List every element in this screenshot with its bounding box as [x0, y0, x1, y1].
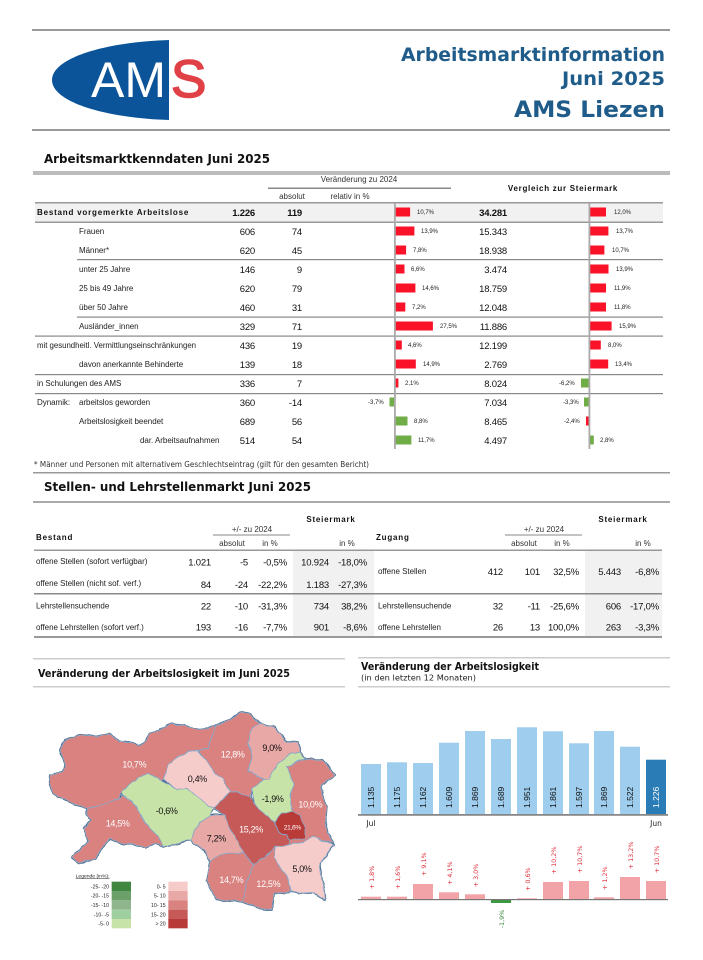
row: offene Stellen nicht sofort verfügbar: 84 [201, 580, 211, 591]
bar chart: Veränderung zum Vorjahr in Prozent: + 4,1% [446, 861, 454, 885]
row: davon anerkannte Behinderte [79, 360, 633, 371]
bar chart: Veränderung zum Vorjahr in Prozent: + 9,1% [420, 852, 428, 876]
row: über 50 Jahre: 12.048 [479, 303, 507, 314]
row: Frauen [79, 226, 634, 238]
row: offene Lehrstellen sofort verfügbar: offene Lehrstellen (sofort verf.) [36, 623, 144, 632]
row: Ausländer_innen [79, 322, 637, 333]
row: Ausländer_innen: 71 [292, 322, 302, 333]
row: Zugang offene Stellen: 32,5% [553, 567, 580, 578]
row: in Schulungen des AMS: in Schulungen des AMS [37, 379, 121, 388]
row: Arbeitslosigkeit beendet: Arbeitslosigkeit beendet [79, 417, 164, 426]
row: 25 bis 49 Jahre [79, 284, 631, 295]
heading: Stellen- und Lehrstellenmarkt: Stellen- und Lehrstellenmarkt Juni 2025 [44, 479, 311, 494]
row: offene Stellen sofort verfügbar [36, 557, 368, 568]
row: Dynamik arbeitslos geworden: 360 [240, 398, 255, 409]
table head: Zugang: in % [554, 539, 570, 548]
row: Bestand vorgemerkte Arbeitslose [37, 208, 632, 219]
row: Arbeitslosigkeit beendet: 56 [292, 417, 302, 428]
row: Zugang offene Stellen [378, 567, 660, 578]
row: in Schulungen des AMS: 336 [240, 379, 255, 390]
row: Bestand vorgemerkte Arbeitslose: 119 [287, 208, 302, 219]
row: Ausländer_innen: 11.886 [480, 322, 507, 333]
bar chart: Veränderung zum Vorjahr in Prozent: + 13,2% [627, 842, 635, 869]
row: mit gesundheitl. Vermittlungseinschränkungen: 4,6% [408, 343, 422, 349]
row: offene Stellen sofort verfügbar: offene Stellen (sofort verfügbar) [36, 557, 148, 566]
row: offene Stellen nicht sofort verfügbar: 1.183 [306, 580, 329, 591]
row: offene Stellen sofort verfügbar: 1.021 [188, 558, 211, 568]
row: unter 25 Jahre [79, 264, 634, 276]
row: Dynamik arbeitslos geworden: 7.034 [484, 398, 507, 409]
bar chart: Veränderung zum Vorjahr in Prozent: -1,9% [498, 910, 506, 928]
row: unter 25 Jahre: 146 [240, 265, 255, 276]
map legend [76, 873, 188, 928]
bar chart: Arbeitslose letzte 12 Monate: 1.869 [470, 786, 480, 808]
bar chart: Arbeitslose letzte 12 Monate: 1.522 [625, 786, 635, 808]
row: offene Lehrstellen sofort verfügbar: -7,7% [263, 622, 288, 634]
row: Arbeitslosigkeit beendet [79, 416, 589, 428]
bar chart: Arbeitslose letzte 12 Monate: Jun [649, 819, 662, 828]
row: über 50 Jahre: über 50 Jahre [79, 303, 129, 312]
row: Frauen: 13,9% [421, 229, 439, 235]
table head: Bestand: in % [262, 539, 278, 548]
bar chart: Arbeitslose letzte 12 Monate: 1.689 [496, 786, 506, 808]
row: Männer: 45 [292, 246, 302, 257]
row: Zugang Lehrstellensuchende: Lehrstellensuchende [378, 602, 452, 610]
table head: Bestand: in % [339, 539, 355, 548]
bar chart: Arbeitslose letzte 12 Monate: 1.135 [366, 786, 376, 808]
row: mit gesundheitl. Vermittlungseinschränkungen: 436 [240, 341, 255, 352]
row: über 50 Jahre: 460 [240, 303, 255, 314]
row: mit gesundheitl. Vermittlungseinschränkungen: 19 [292, 341, 302, 352]
map legend: Legende (in%): [76, 873, 109, 879]
row: Dynamik arbeitslos geworden: arbeitslos geworden [79, 398, 150, 407]
map labels: 9,0% [262, 743, 282, 753]
table head: absolut [279, 192, 306, 201]
bar chart: Veränderung zum Vorjahr in Prozent [358, 842, 668, 928]
bar chart: Veränderung zum Vorjahr in Prozent: + 10,2% [550, 847, 558, 874]
row: unter 25 Jahre: 3.474 [484, 265, 507, 276]
row: offene Lehrstellen sofort verfügbar: 901 [314, 622, 329, 634]
table head: Bestand [36, 515, 356, 548]
bar chart: Arbeitslose letzte 12 Monate: 1.951 [522, 786, 532, 808]
row: offene Stellen sofort verfügbar: -5 [240, 558, 248, 568]
bar chart: Arbeitslose letzte 12 Monate [358, 727, 668, 828]
row: Ausländer_innen: 15,9% [619, 324, 637, 330]
row: Bestand vorgemerkte Arbeitslose: 1.226 [232, 208, 255, 219]
map legend: 0- 5 [157, 884, 166, 890]
row: Arbeitslosigkeit beendet: 8.465 [484, 417, 507, 428]
panel heading: Veränderung der Arbeitslosigkeit 12 Monate: Veränderung der Arbeitslosigkeit [361, 661, 539, 673]
map legend: 5- 10 [154, 894, 166, 900]
map legend: -5- 0 [98, 922, 109, 928]
bar chart: Veränderung zum Vorjahr in Prozent: + 3,0% [472, 864, 480, 887]
bar chart: Arbeitslose letzte 12 Monate: 1.162 [418, 786, 428, 808]
row: davon anerkannte Behinderte: 18 [292, 360, 302, 371]
row: 25 bis 49 Jahre: 18.759 [479, 284, 507, 295]
row: Lehrstellensuchende [36, 602, 368, 612]
row: mit gesundheitl. Vermittlungseinschränkungen [37, 340, 622, 352]
row: davon anerkannte Behinderte: 2.769 [484, 360, 507, 371]
row: dar. Arbeitsaufnahmen: dar. Arbeitsaufnahmen [140, 436, 219, 445]
row: Ausländer_innen: Ausländer_innen [79, 322, 139, 331]
row: unter 25 Jahre: 6,6% [411, 267, 425, 273]
logo: AMS: S [171, 50, 206, 109]
row: Dynamik arbeitslos geworden: -3,7% [368, 400, 384, 406]
row: Zugang Lehrstellensuchende: 606 [606, 602, 621, 612]
row: 25 bis 49 Jahre: 11,9% [614, 286, 631, 292]
row: Lehrstellensuchende: 22 [201, 602, 211, 612]
row: Männer: 620 [240, 246, 255, 257]
row: in Schulungen des AMS: 7 [297, 379, 302, 390]
row: Bestand vorgemerkte Arbeitslose: Bestand vorgemerkte Arbeitslose [37, 208, 189, 217]
table head: Zugang: in % [635, 539, 651, 548]
row: Männer [79, 246, 630, 257]
row: in Schulungen des AMS: 2,1% [405, 381, 419, 387]
row: Männer: 10,7% [612, 248, 630, 254]
bar chart: Arbeitslose letzte 12 Monate: 1.861 [548, 786, 558, 808]
row: davon anerkannte Behinderte: 139 [240, 360, 255, 371]
panel heading: Veränderung der Arbeitslosigkeit 12 Monate [358, 657, 670, 688]
row: Zugang offene Stellen: -6,8% [635, 567, 660, 578]
table head [279, 175, 618, 201]
map labels: -0,6% [156, 806, 178, 816]
panel heading: Veränderung der Arbeitslosigkeit im Juni 2025: Veränderung der Arbeitslosigkeit im Juni 2025 [38, 668, 290, 680]
row: Dynamik arbeitslos geworden: -14 [289, 398, 302, 409]
row: 25 bis 49 Jahre: 25 bis 49 Jahre [79, 284, 134, 293]
bar chart: Veränderung zum Vorjahr in Prozent: + 1,8% [368, 866, 376, 889]
title: Juni 2025 [560, 68, 665, 90]
logo: AMS: AM [91, 52, 166, 108]
row: Zugang Lehrstellensuchende [378, 602, 660, 612]
table head: Veränderung zu 2024 [321, 175, 398, 184]
map legend: -10- -5 [94, 912, 109, 918]
row: Zugang Lehrstellensuchende: -11 [528, 602, 540, 612]
map labels: 12,8% [221, 749, 245, 759]
bar chart: Arbeitslose letzte 12 Monate: Jul [365, 819, 376, 828]
row: Männer: 7,8% [413, 248, 427, 254]
bar chart: Veränderung zum Vorjahr in Prozent: + 0,6% [524, 867, 532, 891]
footnote: * Männer und Personen mit alternativem Geschlechtseintrag (gilt für den gesamten Bericht) [34, 460, 369, 469]
row: Zugang offene Lehrstellen: 100,0% [548, 622, 580, 634]
map labels: -1,9% [262, 794, 284, 804]
map: Steiermark [49, 712, 335, 928]
row: dar. Arbeitsaufnahmen: 4.497 [484, 436, 507, 447]
heading: Arbeitsmarktkenndaten: Arbeitsmarktkenndaten Juni 2025 [44, 151, 270, 166]
title: AMS Liezen [514, 97, 665, 123]
table head: relativ in % [330, 192, 370, 201]
map legend: 15- 20 [151, 912, 166, 918]
row: offene Lehrstellen sofort verfügbar [36, 622, 368, 634]
row: offene Stellen nicht sofort verfügbar [36, 579, 368, 591]
table head: Bestand: Steiermark [306, 515, 356, 524]
map legend: -20- -15 [91, 894, 109, 900]
row: Zugang offene Lehrstellen: -3,3% [635, 622, 660, 634]
row: in Schulungen des AMS [37, 378, 589, 390]
row: unter 25 Jahre: 9 [297, 265, 302, 276]
row: offene Stellen sofort verfügbar: -18,0% [338, 558, 368, 568]
row: über 50 Jahre: 11,8% [614, 305, 631, 311]
row: 25 bis 49 Jahre: 79 [292, 284, 302, 295]
bar chart: Veränderung zum Vorjahr in Prozent: + 1,2% [601, 866, 609, 890]
row: Zugang offene Lehrstellen: offene Lehrstellen [378, 623, 441, 632]
logo: AMS [52, 40, 206, 120]
map labels: 14,5% [106, 819, 130, 829]
row: offene Lehrstellen sofort verfügbar: -16 [235, 622, 248, 634]
row: Zugang Lehrstellensuchende: 32 [493, 602, 503, 612]
row: Dynamik arbeitslos geworden: Dynamik: [37, 398, 70, 407]
table: Arbeitsmarktkenndaten [33, 172, 670, 449]
row: Zugang offene Stellen: 5.443 [598, 567, 621, 578]
bar chart: Arbeitslose letzte 12 Monate: 1.609 [444, 786, 454, 808]
row: Dynamik arbeitslos geworden [37, 398, 589, 409]
map legend: -25- -20 [91, 884, 109, 890]
table head: Vergleich zur Steiermark [508, 184, 618, 193]
row: unter 25 Jahre: unter 25 Jahre [79, 265, 131, 274]
row: mit gesundheitl. Vermittlungseinschränkungen: mit gesundheitl. Vermittlungseinschränkungen [37, 341, 196, 350]
row: Ausländer_innen: 329 [240, 322, 255, 333]
row: in Schulungen des AMS: 8.024 [484, 379, 507, 390]
map legend: 10- 15 [151, 903, 166, 909]
row: dar. Arbeitsaufnahmen [140, 436, 614, 447]
table head: Bestand: +/- zu 2024 [232, 525, 273, 534]
title [401, 44, 665, 123]
row: über 50 Jahre: 31 [292, 303, 302, 314]
table head: Zugang [376, 515, 651, 548]
row: Frauen: 606 [240, 227, 255, 238]
map labels: 14,7% [219, 875, 244, 885]
bar chart: Arbeitslose letzte 12 Monate: 1.175 [392, 786, 402, 808]
row: offene Stellen nicht sofort verfügbar: -24 [235, 580, 248, 591]
row: Frauen: Frauen [79, 227, 104, 236]
header [32, 29, 670, 131]
row: Männer: Männer* [79, 246, 109, 255]
bar chart: Arbeitslose letzte 12 Monate: 1.869 [599, 786, 609, 808]
row: unter 25 Jahre: 13,9% [616, 267, 634, 273]
map labels: 10,7% [122, 759, 147, 769]
row: Zugang offene Stellen: offene Stellen [378, 567, 426, 576]
row: Arbeitslosigkeit beendet: 689 [240, 417, 255, 428]
row: Zugang Lehrstellensuchende: -25,6% [550, 602, 580, 612]
row: Zugang offene Lehrstellen [378, 622, 660, 634]
row: offene Lehrstellen sofort verfügbar: 193 [196, 622, 211, 634]
row: Bestand vorgemerkte Arbeitslose: 10,7% [417, 210, 435, 216]
row: Zugang offene Stellen: 412 [488, 567, 503, 578]
row: in Schulungen des AMS: -6,2% [559, 381, 575, 387]
row: Lehrstellensuchende: -10 [235, 602, 248, 612]
row: davon anerkannte Behinderte: davon anerkannte Behinderte [79, 360, 184, 369]
row: dar. Arbeitsaufnahmen: 2,8% [600, 438, 614, 444]
bar chart: Veränderung zum Vorjahr in Prozent: + 1,6% [394, 866, 402, 889]
row: über 50 Jahre [79, 302, 631, 314]
row: Frauen: 15.343 [479, 227, 507, 238]
map labels: 0,4% [188, 774, 207, 784]
row: Zugang Lehrstellensuchende: -17,0% [630, 602, 660, 612]
table head: Zugang: absolut [511, 539, 538, 548]
row: dar. Arbeitsaufnahmen: 54 [292, 436, 302, 447]
table head: Zugang: +/- zu 2024 [524, 525, 565, 534]
row: offene Stellen nicht sofort verfügbar: -22,2% [258, 580, 288, 591]
bar chart: Veränderung zum Vorjahr in Prozent: + 10,7% [653, 846, 661, 873]
row: Arbeitslosigkeit beendet: 8,8% [414, 419, 428, 425]
row: Ausländer_innen: 27,5% [440, 324, 458, 330]
row: offene Stellen nicht sofort verfügbar: -27,3% [338, 580, 368, 591]
row: Zugang offene Lehrstellen: 263 [606, 622, 621, 634]
row: offene Stellen sofort verfügbar: -0,5% [263, 558, 288, 568]
row: Frauen: 74 [292, 227, 302, 238]
map legend: -15- -10 [91, 903, 109, 909]
bar chart: Arbeitslose letzte 12 Monate: 1.597 [574, 786, 584, 808]
row: davon anerkannte Behinderte: 14,9% [423, 362, 441, 368]
map labels: 21,6% [284, 825, 301, 832]
row: Lehrstellensuchende: -31,3% [258, 602, 288, 612]
row: 25 bis 49 Jahre: 14,6% [422, 286, 440, 292]
row: Lehrstellensuchende: 734 [314, 602, 329, 612]
row: offene Stellen sofort verfügbar: 10.924 [301, 558, 329, 568]
table head: Bestand: Bestand [36, 533, 73, 542]
row: Männer: 18.938 [479, 246, 507, 257]
map labels: 10,0% [298, 800, 323, 810]
row: Lehrstellensuchende: 38,2% [341, 602, 368, 612]
table head: Zugang: Steiermark [598, 515, 648, 524]
title: Arbeitsmarktinformation [401, 44, 665, 66]
row: offene Lehrstellen sofort verfügbar: -8,6% [343, 622, 368, 634]
row: Frauen: 13,7% [616, 229, 634, 235]
table: Stellen und Lehrstellen [34, 515, 662, 638]
map labels: 12,5% [256, 879, 281, 889]
row: dar. Arbeitsaufnahmen: 514 [240, 436, 255, 447]
table head: Zugang: Zugang [376, 533, 410, 542]
table head: Bestand: absolut [219, 539, 246, 548]
row: Zugang offene Lehrstellen: 13 [530, 622, 540, 634]
row: 25 bis 49 Jahre: 620 [240, 284, 255, 295]
row: dar. Arbeitsaufnahmen: 11,7% [418, 438, 435, 444]
map labels: 7,2% [207, 834, 226, 844]
row: Zugang offene Stellen: 101 [525, 567, 540, 578]
row: Bestand vorgemerkte Arbeitslose: 12,0% [614, 210, 632, 216]
map labels [106, 743, 323, 889]
row: Zugang offene Lehrstellen: 26 [493, 622, 503, 634]
map legend: > 20 [155, 922, 166, 928]
row: über 50 Jahre: 7,2% [412, 305, 426, 311]
row: Lehrstellensuchende: Lehrstellensuchende [36, 602, 110, 610]
panel heading: Veränderung der Arbeitslosigkeit 12 Monate: (in den letzten 12 Monaten) [361, 674, 476, 682]
row: mit gesundheitl. Vermittlungseinschränkungen: 8,0% [608, 343, 622, 349]
bar chart: Arbeitslose letzte 12 Monate: 1.226 [651, 786, 661, 808]
row: davon anerkannte Behinderte: 13,4% [615, 362, 633, 368]
row: mit gesundheitl. Vermittlungseinschränkungen: 12.199 [479, 341, 507, 352]
row: offene Stellen nicht sofort verfügbar: offene Stellen (nicht sof. verf.) [36, 579, 142, 588]
map labels: 15,2% [239, 825, 263, 835]
row: Bestand vorgemerkte Arbeitslose: 34.281 [479, 208, 508, 219]
bar chart: Veränderung zum Vorjahr in Prozent: + 10,7% [576, 846, 584, 873]
row: Arbeitslosigkeit beendet: -2,4% [564, 419, 580, 425]
row: Dynamik arbeitslos geworden: -3,3% [563, 400, 579, 406]
map labels: 5,0% [292, 864, 312, 874]
